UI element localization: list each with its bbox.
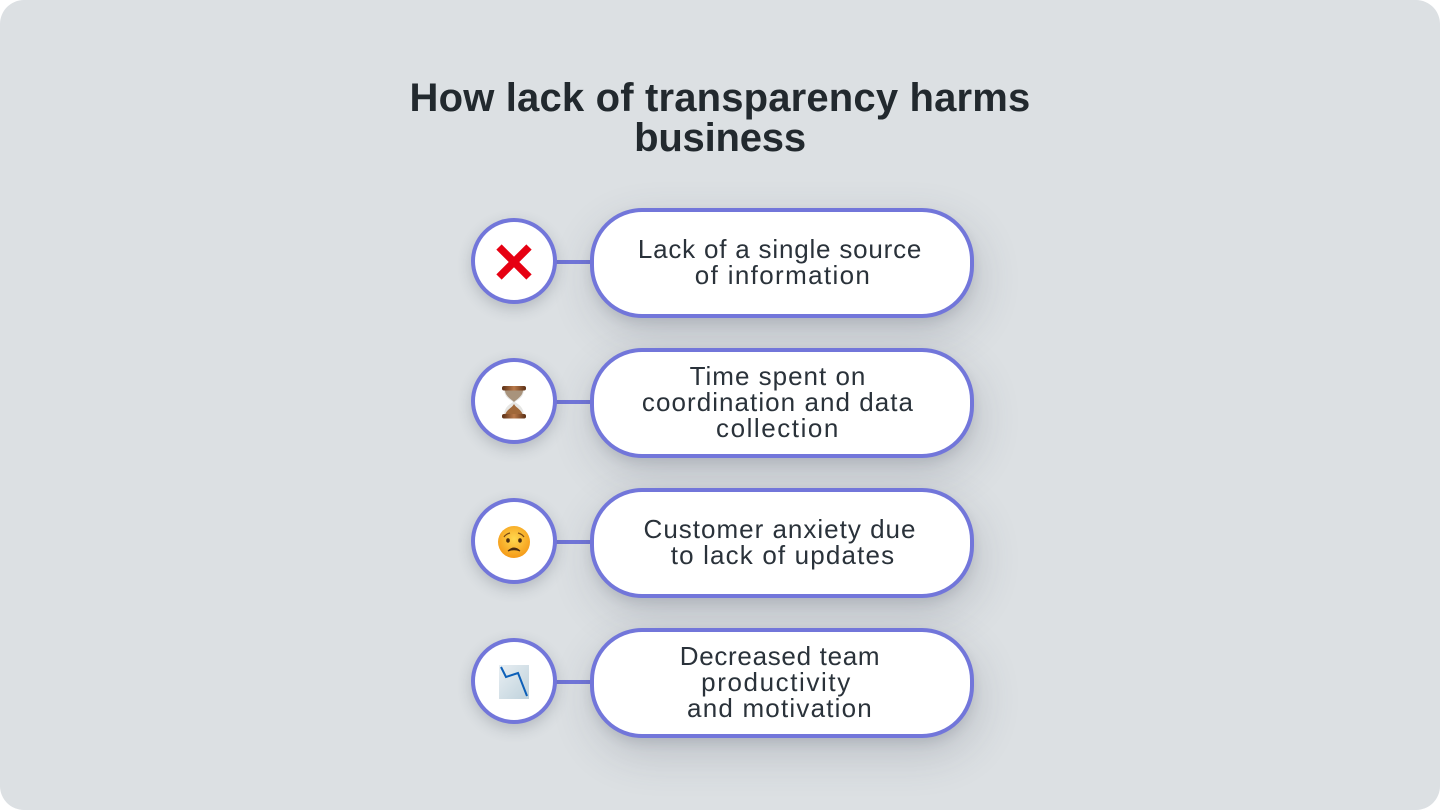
- pill: decreased productivity: productivity: [701, 667, 852, 697]
- row: customer anxiety: [466, 486, 990, 628]
- icon: red cross: [471, 218, 557, 304]
- title: How lack of transparency harms: [410, 76, 1030, 120]
- row: time spent: [466, 346, 990, 488]
- pill: time spent: coordination and data: [642, 387, 914, 417]
- pill: time spent: collection: [716, 413, 840, 443]
- title: [410, 76, 1030, 160]
- row: decreased productivity: [466, 626, 990, 770]
- pill: decreased productivity: Decreased team: [680, 641, 880, 671]
- pill: customer anxiety: Customer anxiety due: [644, 514, 916, 544]
- icon: falling chart: [471, 638, 557, 724]
- icon: worried face: [471, 498, 557, 584]
- pill: time spent: [590, 348, 974, 458]
- pill: decreased productivity: and motivation: [687, 693, 873, 723]
- pill: customer anxiety: [590, 488, 974, 598]
- pill: lack of single source: of information: [695, 260, 871, 290]
- pill: lack of single source: Lack of a single source: [638, 234, 922, 264]
- icon: hourglass: [471, 358, 557, 444]
- title: business: [634, 116, 806, 160]
- pill: decreased productivity: [590, 628, 974, 738]
- pill: customer anxiety: to lack of updates: [671, 540, 895, 570]
- pill: time spent: Time spent on: [690, 361, 866, 391]
- pill: lack of single source: [590, 208, 974, 318]
- row: single source: [466, 206, 990, 348]
